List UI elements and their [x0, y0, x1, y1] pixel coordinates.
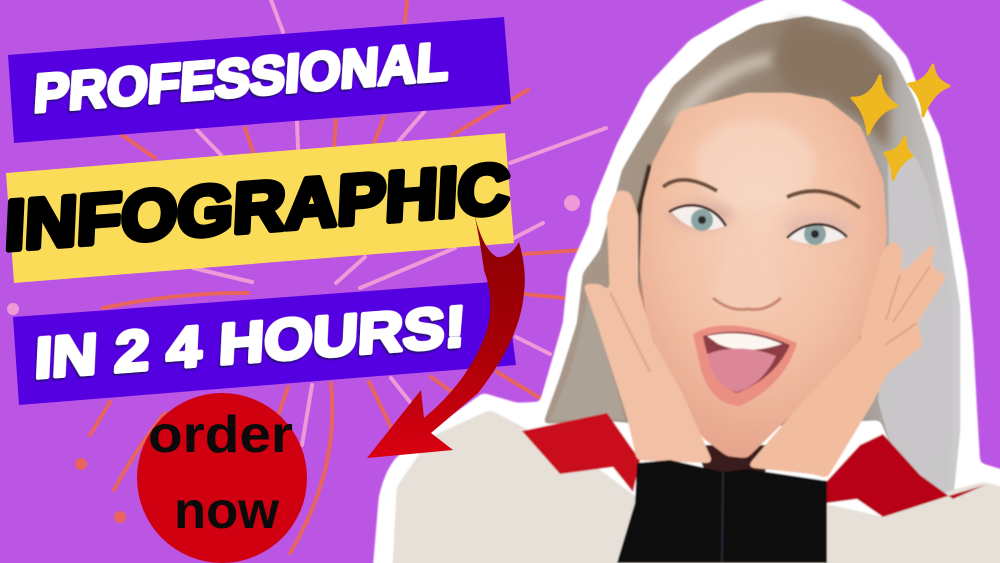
red collar right [827, 434, 985, 517]
banner: in 24 hours [13, 281, 516, 405]
black cuffs [617, 460, 827, 563]
left eye [663, 180, 732, 231]
forehead glow [695, 120, 815, 210]
order now button [137, 393, 307, 563]
hair shadow by the face [636, 165, 650, 285]
red collar left [522, 413, 640, 492]
right hand [747, 240, 947, 478]
left hand [583, 190, 713, 463]
banner: infographic: INFOGRAPHIC [3, 148, 512, 265]
face [640, 93, 887, 458]
banner: professional: PROFESSIONAL [32, 32, 451, 124]
hair parting shade [770, 20, 890, 150]
order now button: order [148, 406, 293, 464]
jaw shadow [640, 285, 880, 385]
white cutout outline [372, 0, 1000, 563]
hair silver lengths [878, 147, 952, 495]
hair highlight [665, 50, 790, 125]
hair [543, 16, 960, 499]
nose [713, 240, 781, 310]
right eye [784, 191, 860, 245]
banner: professional [8, 17, 511, 143]
woman portrait [372, 0, 1000, 563]
mouth [693, 325, 797, 406]
order now button: now [174, 482, 280, 540]
cuff fold [722, 472, 723, 563]
neck shadow [695, 445, 775, 472]
icon: sparkle stars [852, 65, 949, 179]
right hand finger lines [885, 266, 930, 345]
hair lower left [550, 290, 625, 420]
left hand finger line [610, 292, 650, 372]
sweater [392, 410, 1000, 563]
arrow [367, 213, 525, 458]
banner: in 24 hours: IN 2 4 HOURS! [33, 294, 467, 391]
